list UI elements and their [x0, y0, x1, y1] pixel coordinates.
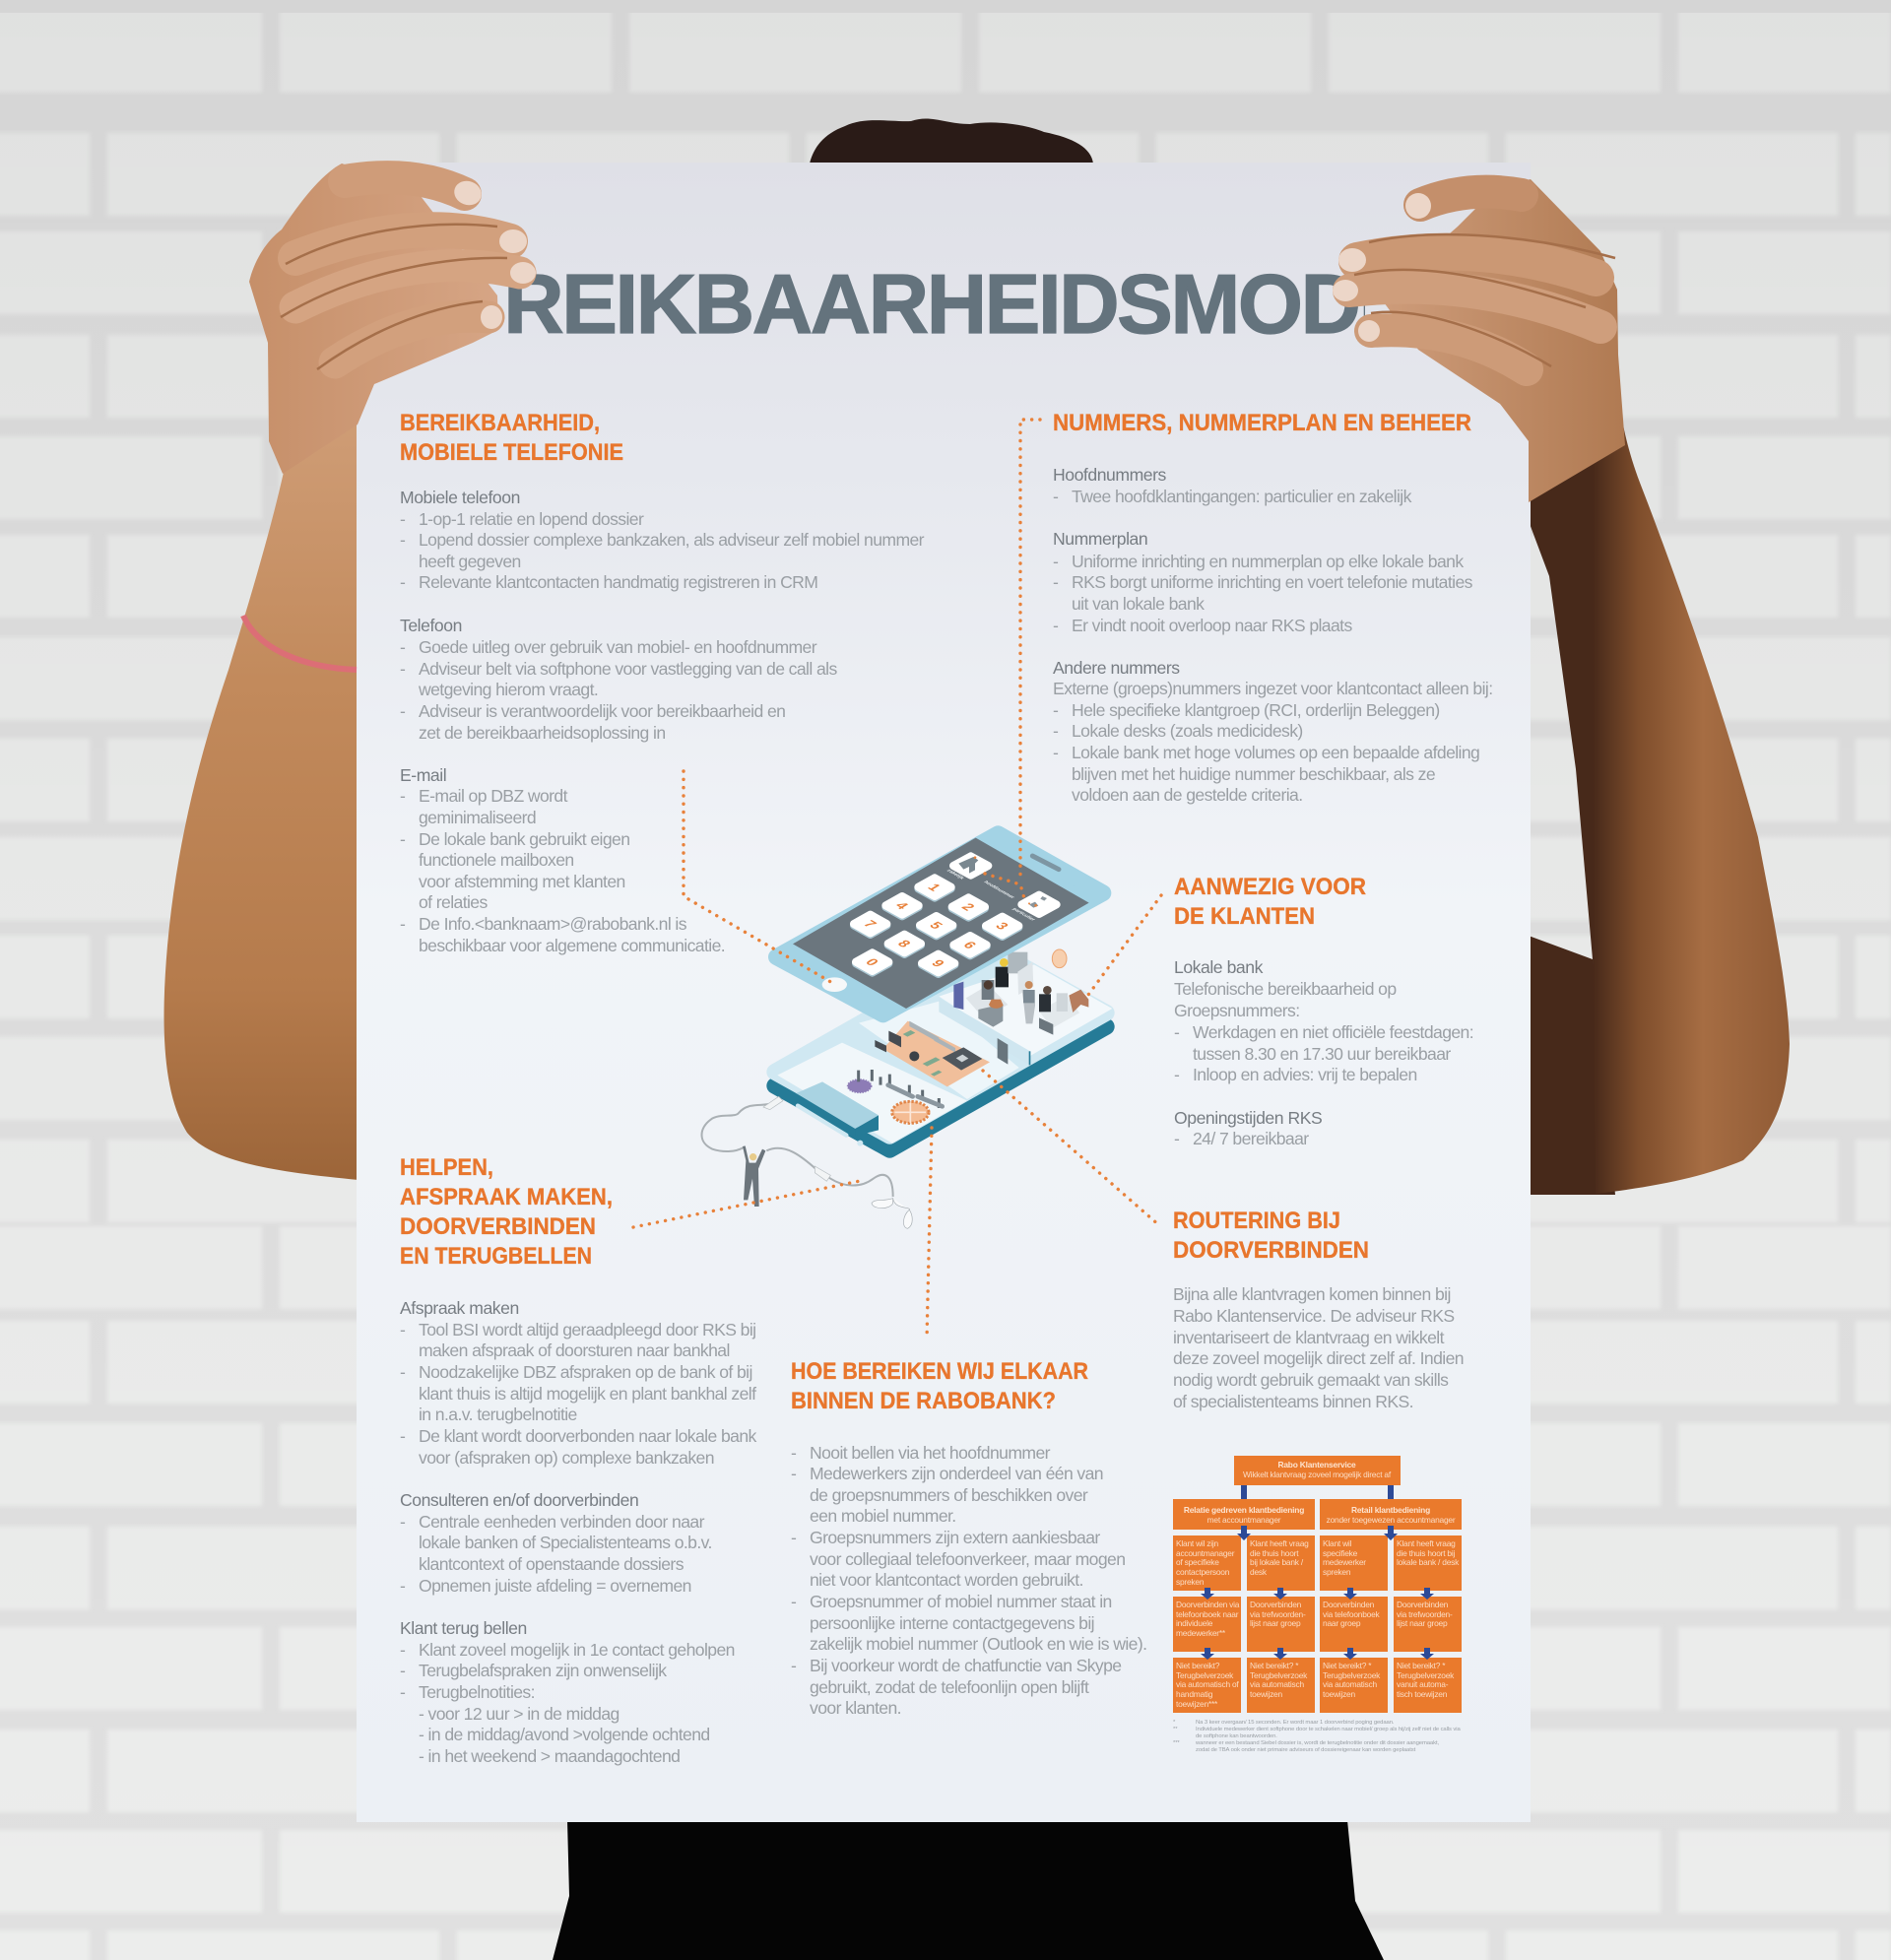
black shirt — [553, 1820, 1384, 1960]
right desk — [1039, 996, 1079, 1028]
bracelet on left wrist — [243, 616, 357, 670]
text block: klant terug bellen: Klant zoveel mogelijk in 1e contact geholpen — [419, 1640, 735, 1660]
text block: e-mail: - — [400, 786, 406, 806]
heading: routering — [1173, 1208, 1369, 1264]
text block: telefoon: - — [400, 659, 406, 679]
keypad digits: 1 — [925, 882, 945, 893]
heading: bereikbaarheid: MOBIELE TELEFONIE — [400, 439, 623, 466]
heading: helpen: DOORVERBINDEN — [400, 1213, 596, 1240]
heading: helpen: HELPEN, — [400, 1154, 493, 1181]
box labels: row 2 — [1176, 1600, 1453, 1638]
box labels: row 3: vanuit automa- — [1397, 1679, 1449, 1689]
text block: lokale bank: - — [1174, 1022, 1180, 1042]
arrow: dotted lead to circuit board — [983, 1071, 1160, 1226]
heading: hoe bereiken: BINNEN DE RABOBANK? — [791, 1388, 1056, 1414]
box labels: row 1: accountmanager — [1176, 1548, 1235, 1558]
text block: lokale bank: - — [1174, 1065, 1180, 1084]
panel: routering bij doorverbinden — [1173, 1208, 1464, 1411]
text block: nummerplan: Uniforme inrichting en nummerplan op elke lokale bank — [1072, 552, 1464, 571]
text block: e-mail: voor afstemming met klanten — [419, 872, 625, 891]
standing figure — [1022, 990, 1035, 1023]
keypad digits: 3 — [992, 920, 1012, 932]
box labels: top levels: Rabo Klantenservice — [1277, 1460, 1356, 1470]
text block: telefoon: Goede uitleg over gebruik van mobiel- en hoofdnummer — [419, 637, 817, 657]
text block: hoe bereiken: gebruikt, zodat de telefoonlijn open blijft — [810, 1677, 1089, 1697]
text block: andere nummers: Lokale bank met hoge volumes op een bepaalde afdeling — [1072, 743, 1479, 762]
circuit board — [883, 1021, 990, 1086]
text block: andere nummers: Hele specifieke klantgroep (RCI, orderlijn Beleggen) — [1072, 700, 1440, 720]
keypad digits — [860, 882, 1012, 969]
box labels: row 1: Klant wil zijn — [1176, 1538, 1219, 1548]
text block: andere nummers — [1053, 658, 1493, 805]
box labels: row 2: via trefwoorden- — [1250, 1609, 1306, 1619]
box labels: row 1: specifieke — [1323, 1548, 1358, 1558]
text block: lokale bank: Telefonische bereikbaarheid op — [1174, 979, 1397, 999]
text block: nummerplan: uit van lokale bank — [1072, 594, 1205, 614]
heading: helpen — [400, 1154, 613, 1270]
box labels: row 3: via automatisch — [1323, 1679, 1377, 1689]
text block: lokale bank: Lokale bank — [1174, 957, 1264, 977]
text block: hoe bereiken: Groepsnummers zijn extern aankiesbaar — [810, 1528, 1100, 1547]
keypad digits: 0 — [862, 956, 882, 968]
text block: nummerplan: - — [1053, 572, 1059, 592]
panel: aanwezig voor de klanten — [1174, 874, 1473, 1148]
keypad digits: 2 — [958, 901, 979, 913]
arrow: dotted lead to home button — [684, 771, 834, 984]
heading: helpen: EN TERUGBELLEN — [400, 1243, 592, 1270]
left hand — [249, 163, 536, 474]
text block: nummerplan: Nummerplan — [1053, 529, 1147, 549]
phone base — [775, 948, 1112, 1149]
box labels: row 1: bij lokale bank / — [1250, 1557, 1304, 1567]
text block: consulteren: Consulteren en/of doorverbinden — [400, 1490, 638, 1510]
text block: klant terug bellen — [400, 1618, 735, 1766]
text block: andere nummers: Lokale desks (zoals medicidesk) — [1072, 721, 1303, 741]
box labels: row 1: desk — [1250, 1567, 1268, 1577]
footnotes: * — [1173, 1720, 1176, 1726]
text block: andere nummers: - — [1053, 743, 1059, 762]
text block: e-mail: of relaties — [419, 892, 488, 912]
text block: nummerplan: - — [1053, 552, 1059, 571]
footnotes: Na 3 keer overgaan/ 15 seconden. Er wordt maar 1 doorverbind poging gedaan. — [1196, 1720, 1395, 1726]
text block: hoofdnummers: Hoofdnummers — [1053, 465, 1167, 485]
screen — [793, 838, 1089, 1009]
text block: mobiele telefoon: 1-op-1 relatie en lopend dossier — [419, 509, 644, 529]
speaker — [1032, 856, 1059, 870]
poster sheet — [357, 163, 1531, 1822]
text block: hoe bereiken: zakelijk mobiel nummer (Outlook en wie is wie). — [810, 1634, 1146, 1654]
text block: telefoon: wetgeving hierom vraagt. — [418, 680, 598, 699]
hair of the person behind the poster — [810, 119, 1093, 163]
text block: andere nummers: Externe (groeps)nummers ingezet voor klantcontact alleen bij: — [1053, 679, 1493, 698]
box labels: row 1: die thuis hoort bij — [1397, 1548, 1455, 1558]
icon labels: particulier — [1011, 907, 1036, 922]
text block: e-mail — [400, 765, 725, 955]
home button — [822, 977, 847, 992]
keypad digits: 4 — [892, 899, 912, 911]
text block: hoe bereiken: Groepsnummer of mobiel nummer staat in — [810, 1592, 1112, 1611]
right hand — [1333, 179, 1625, 502]
title: BEREIKBAARHEIDSMODEL — [392, 258, 1462, 352]
text block: lokale bank: Inloop en advies: vrij te bepalen — [1193, 1065, 1417, 1084]
text block: hoe bereiken: niet voor klantcontact worden gebruikt. — [810, 1570, 1083, 1590]
text block: afspraak maken: - — [400, 1362, 406, 1382]
box labels: row 1: contactpersoon — [1176, 1567, 1230, 1577]
heading: aanwezig — [1174, 874, 1366, 930]
box labels: row 3: Niet bereikt? * — [1323, 1661, 1372, 1670]
box labels: row 3: Niet bereikt? * — [1397, 1661, 1446, 1670]
text block: hoe bereiken: een mobiel nummer. — [810, 1506, 956, 1526]
text block: klant terug bellen: Terugbelnotities: — [419, 1682, 535, 1702]
footnotes: wanneer er een bestaand Siebel dossier is, wordt de terugbelnotitie onder dit dossier aangemaakt, — [1195, 1740, 1439, 1746]
text block: e-mail: beschikbaar voor algemene communicatie. — [419, 936, 725, 955]
text block: mobiele telefoon: - — [400, 572, 406, 592]
box labels: row 2: medewerker** — [1176, 1628, 1226, 1638]
text block: routering: of specialistenteams binnen RKS. — [1173, 1392, 1413, 1411]
box labels: row 3: Terugbelverzoek — [1250, 1670, 1308, 1680]
arrow: dotted lead to gears — [927, 1128, 932, 1339]
keypad digits: 6 — [960, 939, 980, 950]
text block: klant terug bellen: - voor 12 uur > in de middag — [419, 1704, 619, 1724]
text block: nummerplan: - — [1053, 616, 1059, 635]
box labels: top levels: zonder toegewezen accountmanager — [1327, 1515, 1456, 1525]
purple gear — [848, 1079, 872, 1092]
arrow: dotted lead to office — [1088, 895, 1161, 995]
heading: helpen: AFSPRAAK MAKEN, — [400, 1184, 613, 1210]
text block: hoe bereiken: voor klanten. — [810, 1698, 901, 1718]
text block: afspraak maken: maken afspraak of doorsturen naar bankhal — [419, 1340, 730, 1360]
box labels: row 2: Doorverbinden — [1323, 1600, 1375, 1609]
text block: openingstijden: Openingstijden RKS — [1174, 1108, 1322, 1128]
text block: telefoon: Telefoon — [400, 616, 462, 635]
text block: mobiele telefoon: Lopend dossier complexe bankzaken, als adviseur zelf mobiel nummer — [419, 530, 925, 550]
text block: telefoon: - — [400, 637, 406, 657]
text block: telefoon: Adviseur belt via softphone voor vastlegging van de call als — [419, 659, 837, 679]
box labels: row 3: via automatisch — [1250, 1679, 1304, 1689]
box labels: row 1: Klant heeft vraag — [1250, 1538, 1309, 1548]
keypad digits: 9 — [928, 957, 948, 969]
box labels: row 3 — [1176, 1661, 1455, 1709]
door — [998, 1038, 1008, 1065]
text block: afspraak maken — [400, 1298, 757, 1468]
box labels: row 3: Terugbelverzoek — [1176, 1670, 1234, 1680]
box labels: row 3: toewijzen — [1250, 1689, 1282, 1699]
text block: andere nummers: - — [1053, 721, 1059, 741]
icon labels — [946, 869, 1036, 922]
text block: afspraak maken: Tool BSI wordt altijd geraadpleegd door RKS bij — [419, 1320, 755, 1339]
text block: telefoon: - — [400, 701, 406, 721]
box labels: row 2: Doorverbinden — [1250, 1600, 1302, 1609]
text block: e-mail: De Info.<banknaam>@rabobank.nl is — [419, 914, 687, 934]
text block: mobiele telefoon: Mobiele telefoon — [400, 488, 520, 507]
box labels: row 2: via telefoonboek — [1323, 1609, 1381, 1619]
text block: klant terug bellen: - — [400, 1661, 406, 1680]
text block: e-mail: - — [400, 829, 406, 849]
office people and desks — [953, 952, 1088, 1035]
heading: routering: ROUTERING BIJ — [1173, 1208, 1340, 1234]
text block: hoe bereiken: Medewerkers zijn onderdeel van één van — [810, 1464, 1103, 1483]
box labels: row 3: Niet bereikt? — [1176, 1661, 1220, 1670]
text block: afspraak maken: - — [400, 1426, 406, 1446]
heading: aanwezig: AANWEZIG VOOR — [1174, 874, 1366, 900]
box labels: row 1: medewerker — [1323, 1557, 1366, 1567]
text block: consulteren: lokale banken of Specialistenteams o.b.v. — [419, 1533, 712, 1552]
text block: consulteren: Opnemen juiste afdeling = overnemen — [419, 1576, 691, 1596]
text block: lokale bank: Groepsnummers: — [1174, 1001, 1300, 1020]
illustration: exploded phone — [702, 834, 1112, 1228]
box labels: row 3: Terugbelverzoek — [1397, 1670, 1455, 1680]
box labels: row 3: Terugbelverzoek — [1323, 1670, 1381, 1680]
text block: hoe bereiken — [791, 1443, 1146, 1718]
boxes — [1173, 1456, 1462, 1713]
heading: routering: DOORVERBINDEN — [1173, 1237, 1369, 1264]
text block: routering: deze zoveel mogelijk direct zelf af. Indien — [1173, 1348, 1464, 1368]
box labels: row 2: individuele — [1176, 1618, 1213, 1628]
keypad digits: 7 — [860, 918, 880, 930]
right arm — [1529, 374, 1790, 1195]
text block: klant terug bellen: - — [400, 1640, 406, 1660]
text block: hoe bereiken: - — [791, 1656, 797, 1675]
text block: mobiele telefoon — [400, 488, 925, 592]
text block: mobiele telefoon: heeft gegeven — [419, 552, 521, 571]
text block: telefoon — [400, 616, 837, 743]
text block: afspraak maken: Noodzakelijke DBZ afspraken op de bank of bij — [419, 1362, 752, 1382]
text block: telefoon: Adviseur is verantwoordelijk voor bereikbaarheid en — [419, 701, 785, 721]
text block: nummerplan: Er vindt nooit overloop naar RKS plaats — [1072, 616, 1352, 635]
orange gear — [892, 1101, 929, 1123]
keypad digits: 8 — [894, 938, 915, 949]
text block: e-mail: De lokale bank gebruikt eigen — [419, 829, 629, 849]
text block: afspraak maken: De klant wordt doorverbonden naar lokale bank — [419, 1426, 757, 1446]
text block: mobiele telefoon: - — [400, 509, 406, 529]
text block: hoe bereiken: - — [791, 1592, 797, 1611]
text block: lokale bank: tussen 8.30 en 17.30 uur bereikbaar — [1193, 1044, 1451, 1064]
icon: zakelijk — [953, 856, 988, 876]
arrow: dotted lead to connectors — [633, 1180, 865, 1227]
box labels: row 1 — [1176, 1538, 1460, 1587]
box labels: row 2: Doorverbinden via — [1176, 1600, 1240, 1609]
box labels: row 2: naar groep — [1323, 1618, 1361, 1628]
heading: nummers: NUMMERS, NUMMERPLAN EN BEHEER — [1053, 410, 1471, 436]
heading: aanwezig: DE KLANTEN — [1174, 903, 1315, 930]
text block: mobiele telefoon: - — [400, 530, 406, 550]
footnotes: *** — [1173, 1740, 1180, 1746]
text block: hoe bereiken: - — [791, 1528, 797, 1547]
text block: consulteren: klantcontext of openstaande dossiers — [419, 1554, 685, 1574]
text block: afspraak maken: - — [400, 1320, 406, 1339]
text block: openingstijden: 24/ 7 bereikbaar — [1193, 1129, 1309, 1148]
text block: e-mail: geminimaliseerd — [419, 808, 536, 827]
panel: nummers, nummerplan en beheer — [1053, 410, 1493, 805]
text block: klant terug bellen: - in de middag/avond >volgende ochtend — [419, 1725, 710, 1744]
text block: consulteren: Centrale eenheden verbinden door naar — [419, 1512, 705, 1532]
heading: bereikbaarheid — [400, 410, 623, 466]
box labels: top levels: met accountmanager — [1207, 1515, 1281, 1525]
box labels: row 2: lijst naar groep — [1397, 1618, 1448, 1628]
text block: openingstijden: - — [1174, 1129, 1180, 1148]
text block: lokale bank — [1174, 957, 1473, 1084]
arrow: dotted lead to number icons — [985, 420, 1040, 898]
text block: klant terug bellen: - in het weekend > maandagochtend — [419, 1746, 680, 1766]
text block: telefoon: zet de bereikbaarheidsoplossing in — [419, 723, 666, 743]
panel: bereikbaarheid mobiele telefonie — [400, 410, 925, 955]
icon: particulier — [1021, 895, 1057, 914]
box labels: row 3: toewijzen — [1323, 1689, 1355, 1699]
text block: e-mail: functionele mailboxen — [419, 850, 574, 870]
text block: hoofdnummers: Twee hoofdklantingangen: particulier en zakelijk — [1072, 487, 1412, 506]
text block: klant terug bellen: Klant terug bellen — [400, 1618, 527, 1638]
box labels: row 1: of specifieke — [1176, 1557, 1219, 1567]
phone cover — [776, 834, 1103, 1014]
footnotes: zodat de TBA ook onder niet primaire adviseurs of dossiereigenaar kan worden geplaatst — [1196, 1747, 1416, 1753]
text block: consulteren — [400, 1490, 712, 1596]
text block: openingstijden — [1174, 1108, 1322, 1148]
heading: bereikbaarheid: BEREIKBAARHEID, — [400, 410, 600, 436]
text block: hoe bereiken: persoonlijke interne contactgegevens bij — [810, 1613, 1094, 1633]
box labels: row 3: tisch toewijzen — [1397, 1689, 1448, 1699]
keypad — [854, 878, 1018, 974]
icon labels: hoofdnummer — [982, 881, 1015, 899]
box labels: row 1: spreken — [1176, 1577, 1205, 1587]
text block: afspraak maken: klant thuis is altijd mogelijk en plant bankhal zelf — [419, 1384, 756, 1404]
box labels: row 1: spreken — [1323, 1567, 1351, 1577]
coin — [1052, 949, 1067, 968]
text block: routering — [1173, 1284, 1464, 1411]
connectors and arrows — [1201, 1485, 1434, 1660]
box labels: top levels — [1184, 1460, 1456, 1525]
text block: mobiele telefoon: Relevante klantcontacten handmatig registreren in CRM — [419, 572, 817, 592]
text block: nummerplan — [1053, 529, 1473, 635]
icon labels: zakelijk — [946, 869, 965, 881]
panel: hoe bereiken wij elkaar — [791, 1358, 1146, 1718]
box labels: row 2: telefoonboek naar — [1176, 1609, 1239, 1619]
text block: andere nummers: - — [1053, 700, 1059, 720]
box labels: row 3: Niet bereikt? * — [1250, 1661, 1299, 1670]
heading: hoe bereiken — [791, 1358, 1088, 1414]
battery — [796, 1081, 879, 1129]
text block: hoe bereiken: de groepsnummers of beschikken over — [810, 1485, 1088, 1505]
text block: routering: Bijna alle klantvragen komen binnen bij — [1173, 1284, 1451, 1304]
heading: hoe bereiken: HOE BEREIKEN WIJ ELKAAR — [791, 1358, 1088, 1385]
text block: hoe bereiken: - — [791, 1443, 797, 1463]
text block: andere nummers: voldoen aan de gestelde criteria. — [1072, 785, 1303, 805]
box labels: row 2: via trefwoorden- — [1397, 1609, 1453, 1619]
text block: klant terug bellen: Terugbelafspraken zijn onwenselijk — [419, 1661, 667, 1680]
text block: hoe bereiken: Bij voorkeur wordt de chatfunctie van Skype — [810, 1656, 1121, 1675]
box labels: row 3: handmatig — [1176, 1689, 1213, 1699]
left arm — [164, 414, 359, 1180]
text block: andere nummers: Andere nummers — [1053, 658, 1180, 678]
footnotes: Individuele medewerker dient softphone door te schakelen naar mobiel/ groep als hij/zij zelf niet de calls via — [1196, 1727, 1461, 1732]
box labels: top levels: Wikkelt klantvraag zoveel mogelijk direct af — [1243, 1470, 1392, 1479]
text block: consulteren: - — [400, 1576, 406, 1596]
box labels: row 3: via automatisch of — [1176, 1679, 1239, 1689]
cables, earphones and small figure — [702, 1096, 912, 1228]
footnotes: de softphone kan beantwoorden. — [1196, 1733, 1277, 1739]
speaker slot and port — [798, 1106, 846, 1136]
text block: hoofdnummers: - — [1053, 487, 1059, 506]
text block: e-mail: - — [400, 914, 406, 934]
box labels: top levels: Relatie gedreven klantbediening — [1184, 1505, 1304, 1515]
text block: routering: Rabo Klantenservice. De adviseur RKS — [1173, 1306, 1454, 1326]
box labels: top levels: Retail klantbediening — [1351, 1505, 1430, 1515]
text block: e-mail: E-mail — [400, 765, 446, 785]
footnotes — [1173, 1720, 1461, 1753]
box labels: row 1: Klant heeft vraag — [1397, 1538, 1456, 1548]
text block: lokale bank: Werkdagen en niet officiële feestdagen: — [1193, 1022, 1473, 1042]
text block: e-mail: E-mail op DBZ wordt — [419, 786, 568, 806]
text block: nummerplan: RKS borgt uniforme inrichting en voert telefonie mutaties — [1072, 572, 1473, 592]
text block: routering: nodig wordt gebruik gemaakt van skills — [1173, 1370, 1449, 1390]
box labels: row 1: die thuis hoort — [1250, 1548, 1299, 1558]
text block: hoe bereiken: Nooit bellen via het hoofdnummer — [810, 1443, 1051, 1463]
box labels: row 1: Klant wil — [1323, 1538, 1352, 1548]
text block: hoofdnummers — [1053, 465, 1412, 506]
text block: klant terug bellen: - — [400, 1682, 406, 1702]
text block: consulteren: - — [400, 1512, 406, 1532]
text block: afspraak maken: voor (afspraken op) complexe bankzaken — [419, 1448, 714, 1468]
text block: routering: inventariseert de klantvraag en wikkelt — [1173, 1328, 1445, 1347]
text block: andere nummers: blijven met het huidige nummer beschikbaar, als ze — [1072, 764, 1435, 784]
text block: afspraak maken: Afspraak maken — [400, 1298, 519, 1318]
flow chart: routing — [1173, 1456, 1462, 1753]
box labels: row 2: lijst naar groep — [1250, 1618, 1301, 1628]
small figure — [743, 1145, 765, 1207]
box labels: row 2: Doorverbinden — [1397, 1600, 1449, 1609]
panel: helpen, afspraak maken — [400, 1154, 757, 1766]
text block: hoe bereiken: voor collegiaal telefoonverkeer, maar mogen — [810, 1549, 1125, 1569]
text block: afspraak maken: in n.a.v. terugbelnotitie — [419, 1405, 577, 1424]
text block: hoe bereiken: - — [791, 1464, 797, 1483]
footnotes: ** — [1173, 1727, 1178, 1732]
box labels: row 3: toewijzen*** — [1176, 1699, 1218, 1709]
keypad digits: 5 — [926, 919, 946, 931]
box labels: row 1: lokale bank / desk — [1397, 1557, 1460, 1567]
